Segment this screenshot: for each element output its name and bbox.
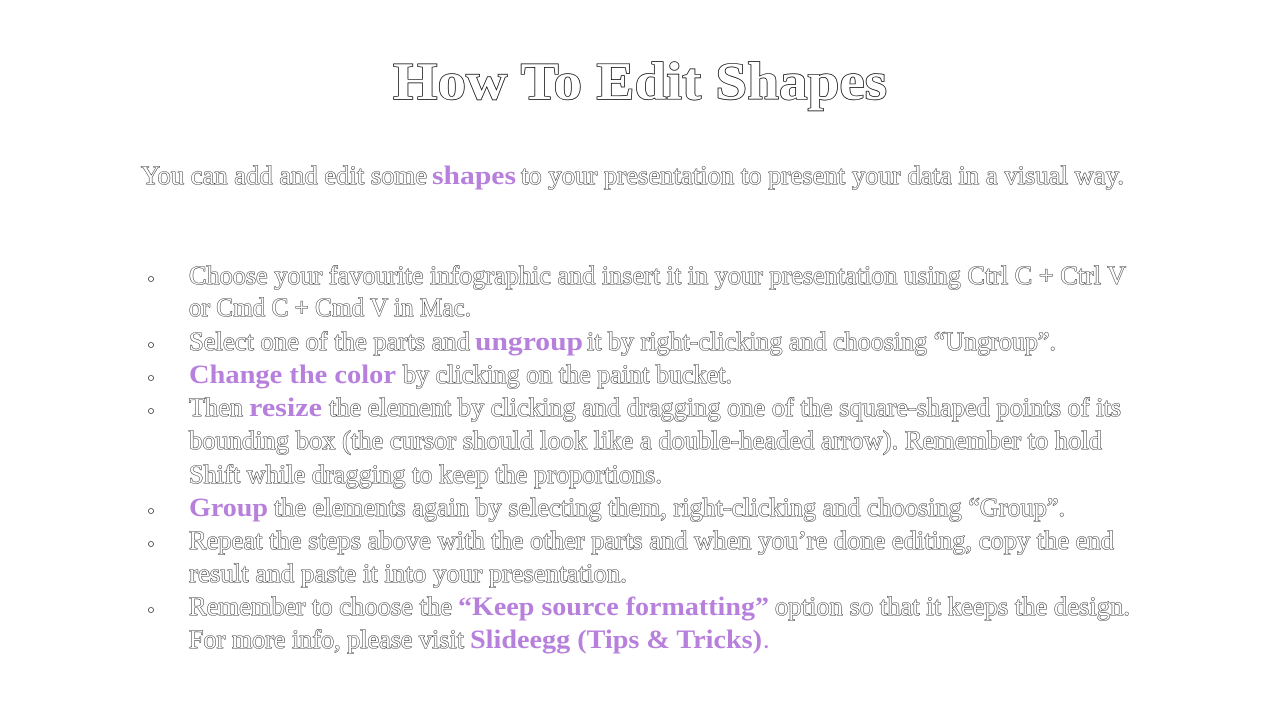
subtitle text bbox=[141, 161, 1124, 190]
bullet 3: change the color: by clicking on the paint bucket. bbox=[403, 360, 732, 389]
bullet 3: change the color bbox=[148, 360, 732, 389]
bullet 3: change the color: Change the color bbox=[189, 360, 396, 389]
subtitle text: You can add and edit some bbox=[141, 161, 427, 190]
bullet 1: choose infographic: Choose your favourite infographic and insert it in your presentation using Ctrl C + Ctrl V bbox=[189, 261, 1126, 290]
bullet 4: resize: Then bbox=[189, 393, 243, 422]
bullet 7: keep source formatting bbox=[148, 592, 1130, 654]
bullet 4: resize: bounding box (the cursor should look like a double-headed arrow). Remember to hold bbox=[189, 426, 1102, 455]
subtitle text: to your presentation to present your data in a visual way. bbox=[521, 161, 1124, 190]
bullet 1: choose infographic: or Cmd C + Cmd V in Mac. bbox=[189, 293, 471, 322]
bullet 6: repeat bbox=[148, 526, 1114, 588]
instruction list bbox=[148, 261, 1130, 654]
bullet 6: repeat: result and paste it into your presentation. bbox=[189, 559, 627, 588]
bullet 7: keep source formatting: Remember to choose the bbox=[189, 592, 452, 621]
title: How To Edit Shapes bbox=[393, 53, 887, 111]
bullet 4: resize bbox=[148, 393, 1121, 489]
bullet 2: ungroup: ungroup bbox=[475, 327, 583, 356]
bullet 2: ungroup: Select one of the parts and bbox=[189, 327, 470, 356]
bullet 4: resize: Shift while dragging to keep the proportions. bbox=[189, 460, 662, 489]
bullet 5: group: the elements again by selecting them, right-clicking and choosing “Group”. bbox=[274, 493, 1065, 522]
bullet 7: keep source formatting: “Keep source formatting” bbox=[458, 592, 769, 621]
bullet 4: resize: the element by clicking and dragging one of the square-shaped points of its bbox=[329, 393, 1121, 422]
bullet 7: keep source formatting: For more info, please visit bbox=[189, 625, 465, 654]
bullet 7: keep source formatting: option so that it keeps the design. bbox=[775, 592, 1130, 621]
subtitle text: shapes bbox=[432, 161, 516, 190]
bullet 2: ungroup bbox=[148, 327, 1056, 356]
bullet 6: repeat: Repeat the steps above with the other parts and when you’re done editing, copy the end bbox=[189, 526, 1114, 555]
bullet 2: ungroup: it by right-clicking and choosing “Ungroup”. bbox=[587, 327, 1056, 356]
bullet 1: choose infographic bbox=[148, 261, 1126, 322]
bullet 7: keep source formatting: Slideegg (Tips & Tricks) bbox=[470, 625, 762, 654]
bullet 7: keep source formatting: . bbox=[763, 625, 770, 654]
bullet 5: group: Group bbox=[189, 493, 268, 522]
bullet 4: resize: resize bbox=[249, 393, 322, 422]
